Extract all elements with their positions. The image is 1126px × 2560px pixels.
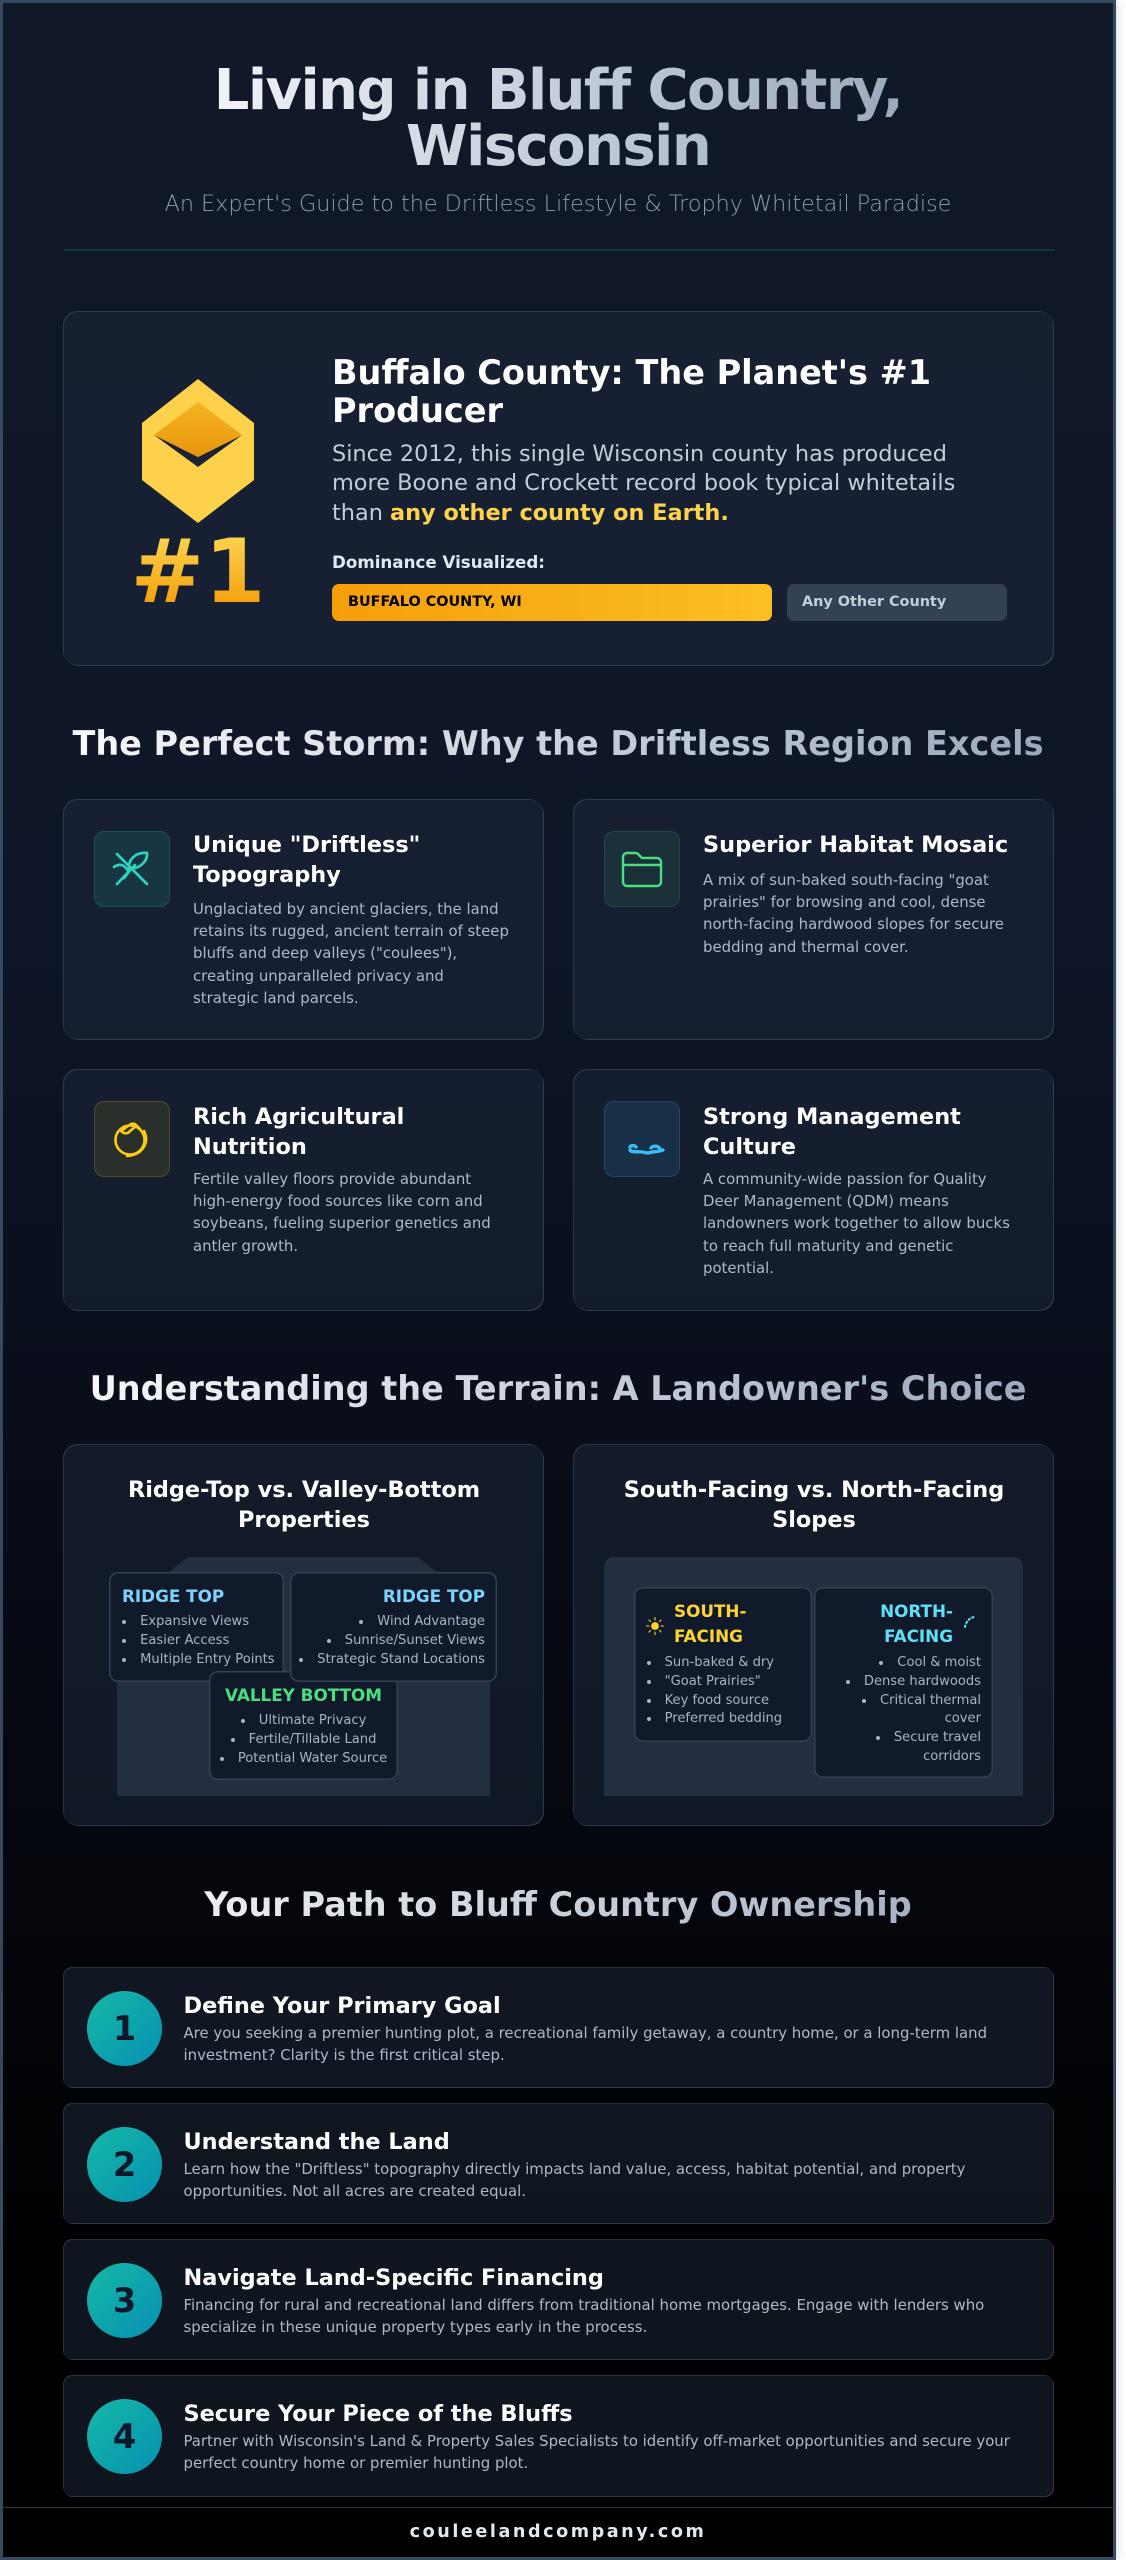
card heading: Topography [193, 862, 341, 888]
card text: high-energy food sources like corn and [193, 1192, 483, 1210]
panel heading [128, 1477, 480, 1533]
title [0, 63, 1116, 175]
text block [332, 440, 955, 526]
callout list [846, 1655, 981, 1764]
card heading: Strong Management [703, 1104, 961, 1130]
callout list: Fertile/Tillable Land [249, 1732, 376, 1747]
step 1 [64, 1968, 1054, 2088]
callout heading: VALLEY BOTTOM [225, 1685, 382, 1705]
panel heading: South-Facing vs. North-Facing [624, 1477, 1004, 1503]
step text [184, 2432, 1010, 2472]
heading: understanding the terrain: Understanding the Terrain: A Landowner's Choice [90, 1369, 1026, 1408]
number badge: 3 [113, 2281, 136, 2320]
callout list: Cool & moist [897, 1655, 981, 1670]
callout list: Strategic Stand Locations [317, 1652, 485, 1667]
callout heading: RIDGE TOP [383, 1586, 485, 1606]
text block: Since 2012, this single Wisconsin county has produced [332, 440, 947, 466]
callout heading: NORTH- [880, 1601, 953, 1621]
text block: more Boone and Crockett record book typical whitetails [332, 470, 955, 496]
card text: soybeans, fueling superior genetics and [193, 1214, 491, 1232]
heading: Producer [332, 391, 503, 430]
panel: Buffalo County hero [64, 312, 1054, 666]
number badge [87, 2127, 162, 2202]
step heading: Define Your Primary Goal [184, 1993, 501, 2019]
number badge [87, 2399, 162, 2474]
icon: golden hexagon [142, 379, 254, 523]
title: Living in Bluff Country, [214, 58, 902, 123]
stat: number one: #1 [131, 520, 265, 622]
card text [193, 900, 509, 1007]
heading: path to ownership [0, 1885, 1116, 1925]
step text: Are you seeking a premier hunting plot, a recreational family getaway, a country home, or a long-term land [184, 2024, 987, 2042]
panel heading: Properties [238, 1507, 370, 1533]
panel: south vs north slopes [574, 1445, 1054, 1826]
card text: Deer Management (QDM) means [703, 1192, 949, 1210]
card heading [703, 1104, 961, 1160]
panel heading [624, 1477, 1004, 1533]
card text: A mix of sun-baked south-facing "goat [703, 871, 989, 889]
card text: bluffs and deep valleys ("coulees"), [193, 944, 457, 962]
icon: folder [604, 831, 680, 907]
bar: Buffalo County: BUFFALO COUNTY, WI [348, 594, 522, 610]
card heading: Unique "Driftless" [193, 832, 420, 858]
step text: perfect country home or premier hunting plot. [184, 2454, 528, 2472]
title: Wisconsin [406, 114, 710, 179]
callout heading: SOUTH- [674, 1601, 746, 1621]
text block: than any other county on Earth. [332, 500, 729, 526]
footer: couleelandcompany.com [410, 2522, 706, 2542]
number badge: 2 [113, 2145, 136, 2184]
card heading: Nutrition [193, 1134, 307, 1160]
bar: other county: Any Other County [802, 594, 946, 610]
callout list [647, 1655, 782, 1726]
callout list [299, 1614, 485, 1667]
callout list: Sun-baked & dry [665, 1655, 774, 1670]
card text: strategic land parcels. [193, 989, 359, 1007]
callout heading: RIDGE TOP [122, 1586, 224, 1606]
callout: north-facing [814, 1587, 993, 1778]
panel: ridge vs valley [64, 1445, 544, 1826]
slope backdrop [604, 1557, 1023, 1796]
callout list: Secure travel [894, 1730, 981, 1745]
step text: Financing for rural and recreational land differs from traditional home mortgages. Engage with lenders who [184, 2296, 984, 2314]
card heading: Superior Habitat Mosaic [703, 832, 1008, 858]
number badge [87, 1991, 162, 2066]
panel: nutrition [64, 1070, 544, 1311]
callout list: Sunrise/Sunset Views [345, 1633, 485, 1648]
card text: Fertile valley floors provide abundant [193, 1170, 471, 1188]
step text: Learn how the "Driftless" topography directly impacts land value, access, habitat potential, and property [184, 2160, 965, 2178]
callout list: Ultimate Privacy [259, 1713, 366, 1728]
card text: A community-wide passion for Quality [703, 1170, 987, 1188]
icon: topography [94, 831, 170, 907]
step text: investment? Clarity is the first critical step. [184, 2046, 505, 2064]
callout: valley bottom [209, 1671, 398, 1780]
terrain silhouette [117, 1557, 490, 1796]
stat: number one [98, 528, 298, 616]
callout: ridge top left [109, 1572, 284, 1682]
step heading: Understand the Land [184, 2129, 450, 2155]
card text: potential. [703, 1259, 774, 1277]
step 3 [64, 2240, 1054, 2360]
callout heading [674, 1601, 746, 1646]
callout: ridge top right [290, 1572, 497, 1682]
icon: moisture [964, 1616, 974, 1628]
card text [703, 871, 1004, 956]
card heading: Culture [703, 1134, 796, 1160]
callout heading: FACING [884, 1626, 953, 1646]
card text [193, 1170, 491, 1255]
card text [703, 1170, 1010, 1277]
icon: handshake [604, 1101, 680, 1177]
callout heading: FACING [674, 1626, 743, 1646]
bar: other county [787, 584, 1007, 621]
callout list: Potential Water Source [238, 1751, 387, 1766]
number badge: 1 [113, 2009, 136, 2048]
step heading: Secure Your Piece of the Bluffs [184, 2401, 573, 2427]
panel: topography [64, 800, 544, 1040]
heading: Buffalo County: The Planet's #1 [332, 353, 931, 392]
callout list [122, 1614, 275, 1667]
step text: Partner with Wisconsin's Land & Property Sales Specialists to identify off-market opportunities and secure your [184, 2432, 1010, 2450]
card heading [193, 832, 420, 888]
card text: bedding and thermal cover. [703, 938, 909, 956]
card text: north-facing hardwood slopes for secure [703, 915, 1004, 933]
callout list: Wind Advantage [377, 1614, 485, 1629]
card text: prairies" for browsing and cool, dense [703, 893, 986, 911]
callout: south-facing [634, 1587, 812, 1742]
callout list: Key food source [665, 1693, 769, 1708]
card text: creating unparalleled privacy and [193, 967, 444, 985]
card text: retains its rugged, ancient terrain of steep [193, 922, 509, 940]
card text: antler growth. [193, 1237, 298, 1255]
step text [184, 2296, 984, 2336]
callout list: Expansive Views [140, 1614, 249, 1629]
panel heading: Ridge-Top vs. Valley-Bottom [128, 1477, 480, 1503]
icon: grain [94, 1101, 170, 1177]
card text: to reach full maturity and genetic [703, 1237, 953, 1255]
step text: specialize in these unique property types early in the process. [184, 2318, 647, 2336]
panel heading: Slopes [772, 1507, 856, 1533]
heading: path to ownership: Your Path to Bluff Country Ownership [204, 1885, 912, 1924]
number badge: 4 [113, 2417, 136, 2456]
callout list: Multiple Entry Points [140, 1652, 275, 1667]
number badge [87, 2263, 162, 2338]
callout list: Dense hardwoods [864, 1674, 981, 1689]
callout list: "Goat Prairies" [665, 1674, 761, 1689]
panel: management [574, 1070, 1054, 1311]
callout heading [880, 1601, 953, 1646]
heading: perfect storm: The Perfect Storm: Why the Driftless Region Excels [72, 724, 1044, 763]
callout list: cover [945, 1711, 981, 1726]
card text: Unglaciated by ancient glaciers, the land [193, 900, 499, 918]
step 2 [64, 2104, 1054, 2224]
bar: Buffalo County [332, 584, 772, 621]
step text [184, 2024, 987, 2064]
panel: habitat [574, 800, 1054, 1040]
heading [332, 353, 931, 430]
icon: sun [646, 1617, 664, 1635]
callout list [220, 1713, 387, 1766]
callout list: Preferred bedding [665, 1711, 782, 1726]
card text: landowners work together to allow bucks [703, 1214, 1010, 1232]
step heading: Navigate Land-Specific Financing [184, 2265, 604, 2291]
label: dominance: Dominance Visualized: [332, 552, 545, 572]
callout list: corridors [923, 1749, 981, 1764]
step text [184, 2160, 965, 2200]
subtitle: An Expert's Guide to the Driftless Lifestyle & Trophy Whitetail Paradise [165, 191, 951, 217]
callout list: Easier Access [140, 1633, 229, 1648]
step text: opportunities. Not all acres are created equal. [184, 2182, 526, 2200]
card heading: Rich Agricultural [193, 1104, 404, 1130]
card heading [193, 1104, 404, 1160]
callout list: Critical thermal [880, 1693, 981, 1708]
step 4 [64, 2376, 1054, 2497]
